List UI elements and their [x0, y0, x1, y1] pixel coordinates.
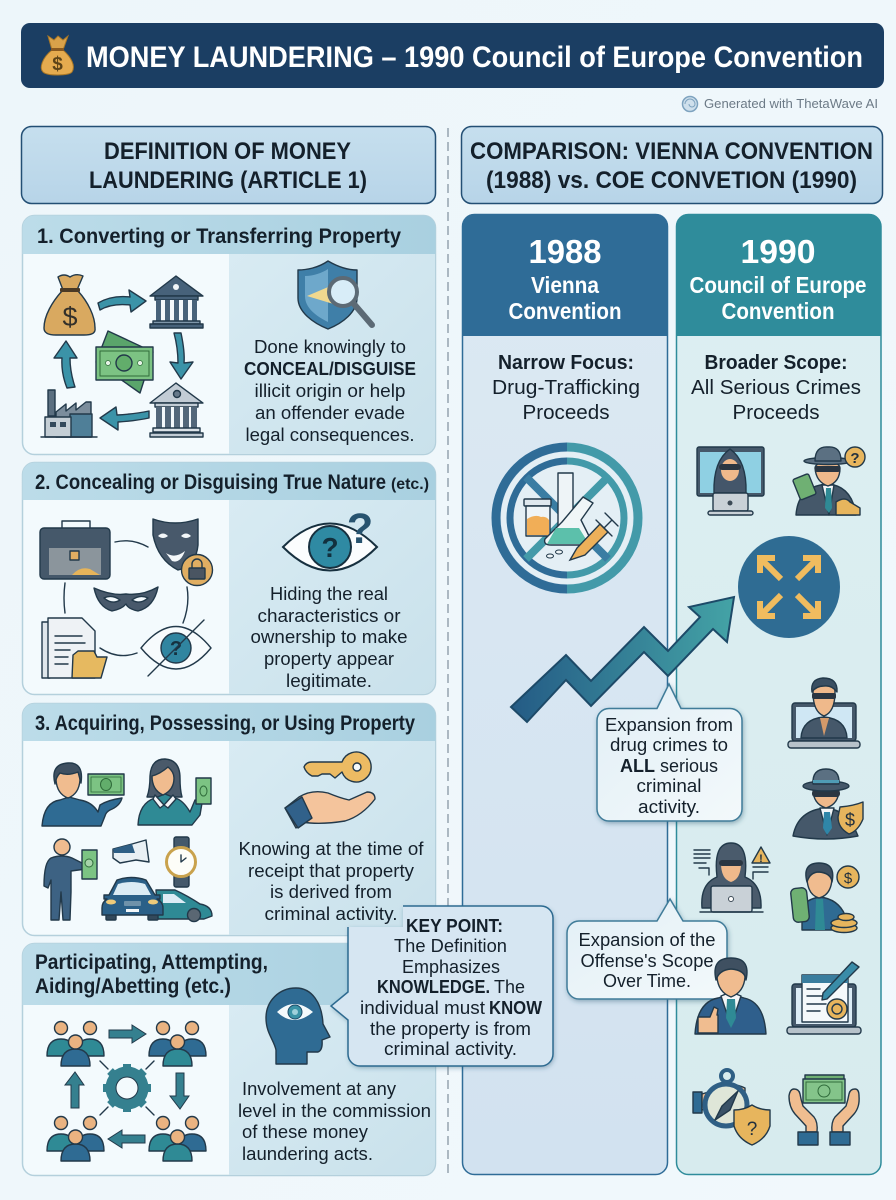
callout: expansion from drug crimes: activity.	[638, 797, 700, 817]
card 3 heading: 3. Acquiring, Possessing, or Using Property	[35, 712, 415, 735]
card 1 description: an offender evade	[255, 403, 405, 423]
bank grey	[150, 383, 203, 437]
1988 column heading: Convention	[508, 298, 622, 324]
card 4 description: laundering acts.	[242, 1144, 373, 1164]
callout: expansion of the offense's scope: Offense's Scope	[580, 951, 714, 971]
icon: spy with hat and shield	[793, 769, 863, 839]
callout: expansion from drug crimes: ALL serious	[620, 756, 718, 776]
icon: shield with magnifier	[298, 261, 372, 329]
1990 scope text	[691, 351, 861, 424]
icon: money bag: $	[52, 54, 63, 75]
panel: card 3 acquiring, possessing, using	[22, 704, 436, 936]
callout: key point: the property is from	[370, 1019, 531, 1039]
heading: comparison	[462, 126, 882, 204]
group arrows	[65, 1025, 189, 1148]
icon: concealment cycle	[40, 519, 212, 678]
callout: key point: KNOW	[489, 998, 542, 1018]
card 2 description: property appear	[264, 649, 394, 669]
callout: key point: Emphasizes	[402, 957, 500, 977]
icon: person with cash and coins	[790, 863, 859, 932]
card 2 heading: (etc.)	[391, 476, 429, 493]
1990 column heading: Council of Europe	[690, 272, 866, 298]
callout: expansion of the offense's scope: Over Time.	[603, 971, 691, 991]
woman with banknote	[138, 759, 211, 825]
shoe	[113, 840, 149, 863]
theatre mask with lock	[153, 519, 212, 586]
icon: eye with question mark	[283, 505, 377, 570]
callout: key point	[331, 906, 553, 1066]
card 4 heading: Participating, Attempting,	[35, 951, 268, 974]
card 1 description: illicit origin or help	[254, 381, 406, 401]
center dashed divider	[447, 128, 449, 1175]
eye with question mark: ?	[170, 638, 182, 660]
card 2 description: Hiding the real	[270, 584, 388, 604]
callout: expansion of the offense's scope: Expansion of the	[578, 930, 716, 950]
icon: compass and shield	[693, 1070, 770, 1145]
icon: money cycle diagram	[41, 275, 203, 437]
1988 column heading	[508, 233, 622, 324]
card 1 description: legal consequences.	[246, 425, 414, 445]
card 1 heading: 1. Converting or Transferring Property	[37, 225, 401, 248]
icon: key over open hand	[285, 752, 375, 828]
arrow: zig-zag expansion arrow	[511, 597, 734, 722]
callout: key point: The Definition	[394, 936, 507, 956]
heading: comparison: COMPARISON: VIENNA CONVENTION	[470, 138, 873, 165]
icon: laptop with pen and seal	[787, 962, 861, 1034]
gear	[100, 1061, 154, 1115]
callout: key point: criminal activity.	[384, 1039, 517, 1059]
card 4 description	[238, 1079, 431, 1164]
callout: expansion from drug crimes: criminal	[636, 776, 702, 796]
callout: key point: KEY POINT:	[406, 916, 503, 936]
1990 scope text: All Serious Crimes	[691, 376, 861, 399]
icon: hooded hacker with warning: !	[759, 853, 763, 865]
card 4 heading	[35, 951, 268, 998]
card 3 description: Knowing at the time of	[238, 839, 425, 859]
callout: expansion from drug crimes: drug crimes to	[610, 735, 728, 755]
panel: card 4 participating, attempting, aiding	[22, 944, 436, 1176]
banknotes	[96, 331, 153, 393]
watermark: generated with ThetaWave AI: Generated with ThetaWave AI	[704, 97, 878, 111]
icon: head with eye	[266, 988, 330, 1064]
card 4 description: level in the commission	[238, 1101, 431, 1121]
man with banknote	[42, 763, 124, 826]
domino mask	[94, 587, 158, 611]
panel: card 1 converting or transferring property	[22, 216, 436, 454]
1988 scope text	[492, 351, 640, 424]
icon: groups around gear	[47, 1022, 206, 1161]
1988 column heading: 1988	[528, 233, 602, 270]
1990 column heading: 1990	[740, 233, 816, 270]
icon: spy with hat and shield: $	[845, 810, 855, 830]
icon: eye with question mark: ?	[321, 532, 339, 563]
arrow up	[54, 341, 77, 388]
card 4 heading: Aiding/Abetting (etc.)	[35, 975, 231, 998]
arrow down	[170, 333, 193, 379]
icon: spy with money	[792, 447, 865, 515]
card 3 description	[238, 839, 425, 902]
icon: money bag	[41, 36, 73, 75]
man standing with banknote	[44, 839, 97, 920]
arrow right	[98, 290, 146, 312]
card 2 description: legitimate.	[286, 671, 372, 691]
icon: hands holding banknote	[789, 1075, 859, 1145]
icon: expansion circle with arrows	[738, 536, 840, 638]
icon: people with illicit assets	[42, 759, 212, 922]
icon: prohibited drugs	[496, 447, 638, 589]
card 1 description	[244, 337, 416, 445]
icon: person with cash and coins: $	[844, 870, 853, 887]
icon: spy on laptop	[788, 678, 860, 748]
card 2 description	[250, 584, 408, 691]
panel: card 2 concealing or disguising	[22, 462, 436, 694]
callout: expansion from drug crimes: Expansion from	[605, 715, 733, 735]
heading: definition of money laundering: LAUNDERING (ARTICLE 1)	[89, 167, 367, 194]
card 1 description: CONCEAL/DISGUISE	[244, 359, 416, 379]
flask	[545, 497, 593, 545]
card 1 description: Done knowingly to	[254, 337, 406, 357]
briefcase	[40, 521, 110, 579]
card 2 description: characteristics or	[258, 606, 400, 626]
heading: definition of money laundering	[22, 126, 436, 204]
icon: eye with question mark: ?	[347, 505, 373, 553]
panel: 1990 Council of Europe Convention	[676, 214, 881, 1174]
title banner	[21, 23, 884, 88]
card 4 description: Involvement at any	[242, 1079, 396, 1099]
test tube	[558, 473, 573, 535]
callout: expansion of the offense's scope	[567, 899, 727, 999]
1990 column heading: Convention	[722, 298, 834, 324]
blue car	[102, 878, 163, 920]
document and folder	[42, 618, 107, 678]
factory	[41, 390, 97, 437]
arrow left	[100, 407, 149, 430]
1990 scope text: Proceeds	[732, 401, 820, 424]
card 2 description: ownership to make	[250, 627, 408, 647]
watch	[166, 837, 196, 887]
money bag	[44, 275, 95, 335]
1990 column heading	[690, 233, 866, 324]
icon: hacker at monitor	[697, 447, 764, 515]
1988 column heading: Vienna	[531, 272, 599, 298]
icon: hooded hacker with warning	[694, 843, 770, 912]
1988 scope text: Narrow Focus:	[498, 351, 634, 374]
callout: key point: KNOWLEDGE.	[377, 977, 490, 997]
1990 scope text: Broader Scope:	[704, 351, 848, 374]
jar	[524, 499, 551, 536]
heading: definition of money laundering: DEFINITION OF MONEY	[104, 138, 351, 165]
card 3 description last line: criminal activity.	[264, 904, 398, 924]
callout: key point: individual must	[360, 998, 485, 1018]
teal car	[156, 890, 212, 922]
card 2 heading: 2. Concealing or Disguising True Nature	[35, 471, 386, 494]
callout: expansion from drug crimes	[597, 684, 742, 821]
card 3 description: is derived from	[270, 882, 392, 902]
bank blue	[150, 276, 203, 328]
icon: spy with money: ?	[850, 450, 860, 467]
icon: businessman thumbs up	[695, 958, 766, 1034]
money bag: $	[62, 302, 78, 332]
card 3 description: receipt that property	[248, 861, 414, 881]
card 4 description: of these money	[242, 1122, 368, 1142]
heading: comparison: (1988) vs. COE CONVETION (1990)	[486, 167, 857, 194]
syringe	[570, 513, 618, 560]
1988 scope text: Drug-Trafficking	[492, 376, 640, 399]
1988 scope text: Proceeds	[522, 401, 610, 424]
panel: 1988 Vienna Convention	[462, 214, 668, 1174]
icon: compass and shield: ?	[747, 1119, 757, 1140]
eye with question mark	[141, 620, 211, 676]
callout: key point: The	[494, 977, 525, 997]
